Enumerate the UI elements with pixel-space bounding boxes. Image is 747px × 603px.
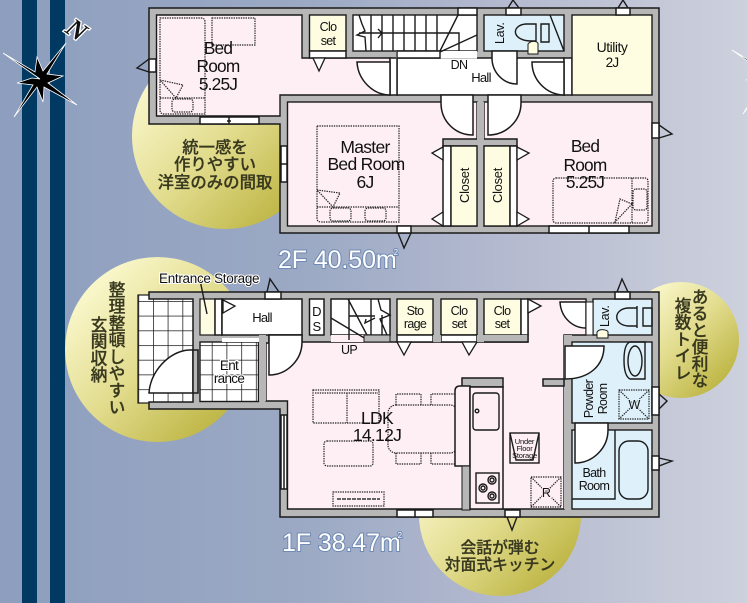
callout text: multiple toilets bbox=[672, 288, 708, 389]
under floor storage: Under bbox=[515, 437, 535, 446]
powder room: W bbox=[628, 398, 640, 412]
storage and closets 1F bbox=[397, 299, 541, 355]
stove bbox=[476, 473, 499, 503]
bath room: Room bbox=[579, 479, 610, 493]
master bed room bbox=[288, 102, 477, 226]
LDK label: LDK bbox=[361, 408, 394, 428]
entrance tile area bbox=[200, 338, 259, 402]
bed room 5.25J south-east: 5.25J bbox=[566, 172, 604, 192]
DS: D bbox=[312, 304, 321, 319]
callout circle: entrance bbox=[65, 257, 250, 442]
2F windows bbox=[137, 0, 672, 248]
under floor storage bbox=[510, 433, 539, 463]
bedroom 5.25J north-west bbox=[156, 15, 390, 116]
powder room: Room bbox=[596, 383, 610, 414]
floor plan 1F bbox=[138, 279, 672, 530]
closets 2F: Closet bbox=[457, 167, 472, 203]
bed furniture north-west bbox=[160, 18, 255, 114]
compass north arrow bbox=[3, 12, 94, 117]
stairs 2F bbox=[353, 8, 477, 58]
interior walls 1F bbox=[259, 335, 572, 509]
bath room bbox=[572, 423, 652, 509]
utility bbox=[572, 15, 652, 95]
storage and closets 1F: Clo bbox=[494, 304, 511, 318]
LDK label: 14.12J bbox=[353, 425, 401, 445]
hall 1F: Hall bbox=[252, 310, 273, 325]
kitchen bbox=[455, 378, 503, 510]
callout text: kitchen: 会話が弾む bbox=[460, 538, 540, 557]
storage and closets 1F: set bbox=[495, 317, 511, 331]
callout text: entrance storage bbox=[88, 281, 125, 415]
entrance tile area: rance bbox=[214, 371, 244, 386]
callout text: kitchen bbox=[445, 538, 555, 574]
storage and closets 1F: Clo bbox=[451, 304, 468, 318]
toilet 1F bbox=[593, 299, 652, 338]
compass right edge bbox=[732, 40, 747, 114]
refrigerator space bbox=[531, 477, 561, 507]
sink bbox=[473, 393, 499, 430]
floor label 1F: 1F 38.47m bbox=[282, 529, 401, 557]
utility: Utility bbox=[597, 39, 628, 55]
DS: S bbox=[313, 319, 322, 334]
callout text: unified western rooms: 洋室のみの間取 bbox=[158, 174, 273, 192]
refrigerator space: R bbox=[542, 486, 551, 500]
bed room 5.25J south-east: Bed bbox=[571, 136, 599, 156]
storage and closets 1F: set bbox=[452, 317, 468, 331]
callout text: unified western rooms: 作りやすい bbox=[174, 156, 256, 174]
closets 2F: Closet bbox=[490, 167, 505, 203]
LDK room bbox=[266, 299, 586, 509]
callout text: entrance storage: 整理整頓しやすい bbox=[106, 281, 125, 415]
entrance door bbox=[149, 350, 193, 393]
storage and closets 1F: rage bbox=[404, 317, 427, 331]
storage and closets 1F: Sto bbox=[407, 304, 424, 318]
DS bbox=[310, 299, 324, 335]
toilet 1F: Lav. bbox=[598, 306, 612, 327]
master bed room: Master bbox=[340, 137, 391, 157]
porch tile bbox=[138, 295, 194, 403]
1F windows bbox=[265, 279, 672, 530]
callout circle: kitchen bbox=[419, 434, 581, 596]
bed room label north-west: Room bbox=[197, 56, 240, 76]
hall 1F bbox=[222, 299, 302, 335]
hall 2F: DN bbox=[451, 58, 468, 72]
bed room 5.25J south-east bbox=[484, 102, 652, 226]
master bed room: 6J bbox=[356, 172, 374, 192]
LDK door bbox=[269, 335, 302, 375]
compass north arrow: N bbox=[60, 12, 94, 48]
1F outer walls bbox=[149, 292, 659, 517]
callout text: unified western rooms: 統一感を bbox=[182, 139, 248, 157]
2F doors bbox=[357, 51, 564, 95]
callout text: kitchen: 対面式キッチン bbox=[445, 556, 555, 574]
stairs 1F: UP bbox=[341, 343, 357, 357]
powder room bbox=[565, 342, 652, 423]
callout circle: bedroom bbox=[132, 43, 318, 229]
bed room label north-west bbox=[197, 38, 240, 94]
closets 2F bbox=[313, 58, 529, 226]
living and dining furniture bbox=[313, 390, 458, 506]
closet upper bbox=[310, 15, 346, 58]
entrance storage bbox=[200, 280, 222, 335]
closet upper: Clo bbox=[320, 20, 337, 34]
lavatory 2F bbox=[484, 15, 564, 54]
interior doors lower 2F bbox=[441, 95, 521, 135]
floor plan 2F bbox=[137, 0, 672, 248]
closet upper: set bbox=[321, 34, 337, 48]
callout text: entrance storage: 玄関収納 bbox=[88, 316, 107, 384]
navy stripes bbox=[22, 0, 65, 603]
callout text: multiple toilets: 複数トイレ bbox=[672, 297, 691, 381]
hall 2F: Hall bbox=[471, 70, 492, 85]
callout circle: toilet bbox=[623, 282, 739, 398]
bed room label north-west: 5.25J bbox=[199, 74, 237, 94]
2F outer walls bbox=[149, 8, 659, 233]
floor label 2F: 2 bbox=[394, 248, 399, 257]
entrance tile area: Ent bbox=[220, 358, 239, 373]
floor label 1F: 2 bbox=[398, 531, 403, 540]
under floor storage: Storage bbox=[512, 451, 537, 460]
callout text: multiple toilets: あると便利な bbox=[689, 288, 708, 389]
LDK label bbox=[353, 408, 401, 445]
bed room label north-west: Bed bbox=[204, 38, 232, 58]
bath room: Bath bbox=[583, 466, 606, 480]
under floor storage: Floor bbox=[516, 444, 533, 453]
powder room: Powder bbox=[582, 379, 596, 418]
master bed room: Bed Room bbox=[327, 154, 405, 174]
hall 2F bbox=[390, 58, 572, 95]
stairs 1F bbox=[331, 299, 390, 357]
callout text: unified western rooms bbox=[158, 139, 273, 192]
bed room 5.25J south-east: Room bbox=[564, 155, 607, 175]
utility: 2J bbox=[606, 55, 618, 70]
entrance storage label: Entrance Storage bbox=[159, 271, 259, 286]
lavatory 2F: Lav. bbox=[493, 22, 507, 44]
floor label 2F: 2F 40.50m bbox=[278, 246, 397, 274]
toilet door bbox=[560, 302, 586, 328]
